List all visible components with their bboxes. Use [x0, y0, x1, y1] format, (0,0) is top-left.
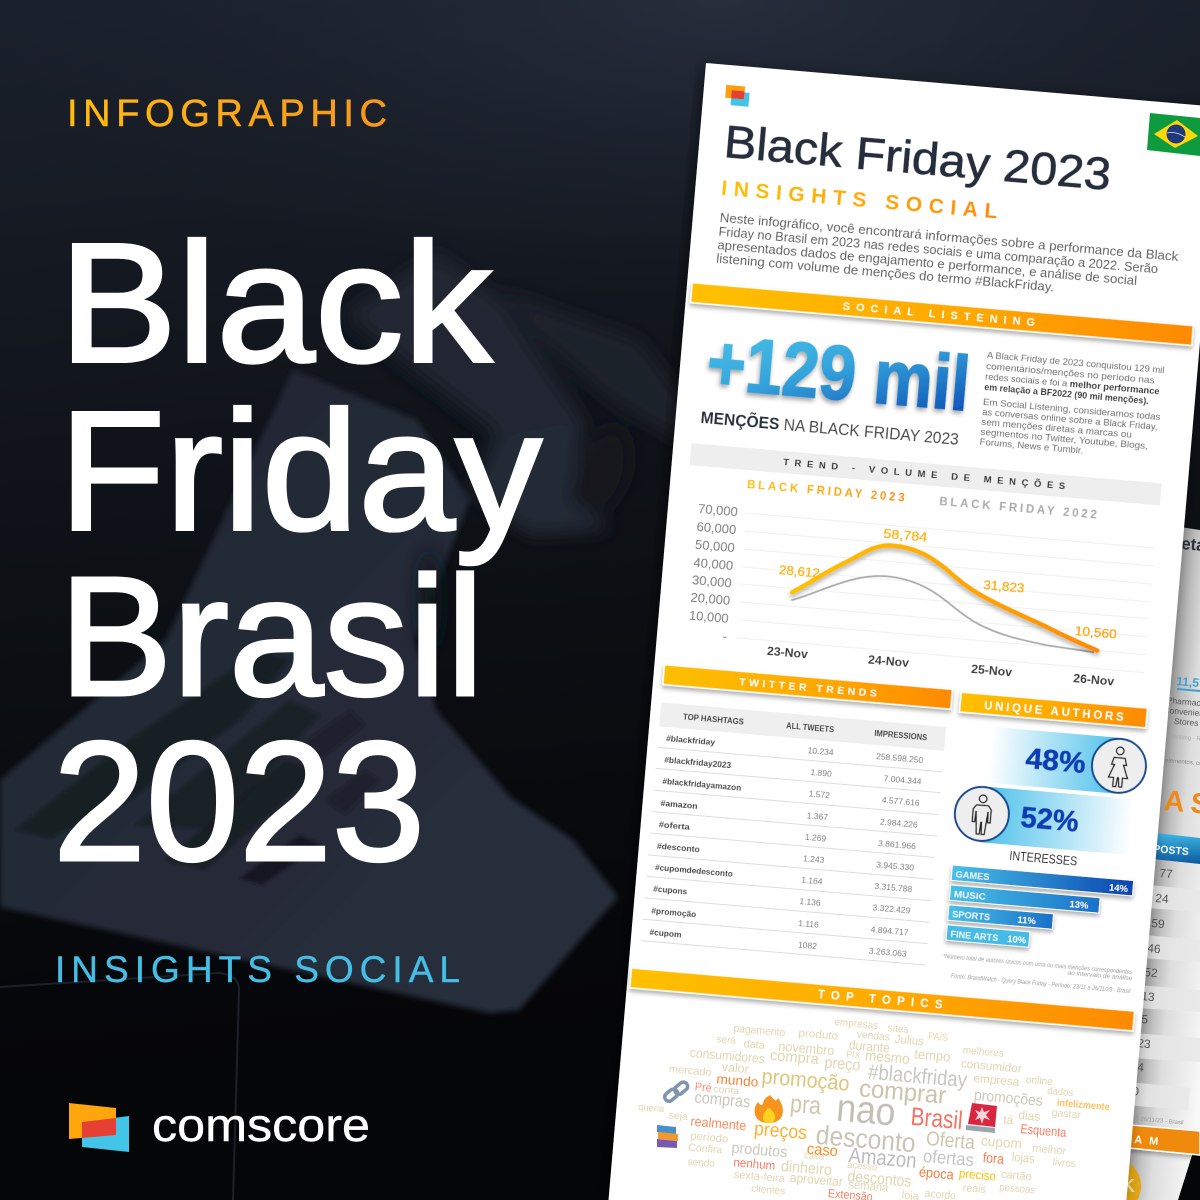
table: top hashtags: ALL TWEETS [786, 721, 835, 734]
table: top hashtags: #amazon [660, 798, 698, 811]
section band: twitter trends [663, 665, 952, 709]
word cloud: top topics: fora [982, 1149, 1005, 1167]
explanatory text: em relação a BF2022 (90 mil menções). [984, 382, 1149, 407]
word cloud: top topics: melhores [962, 1044, 1004, 1060]
word cloud: top topics: nenhum [733, 1155, 776, 1173]
word cloud: top topics: período [690, 1130, 729, 1146]
line chart: 50,000 [694, 537, 735, 555]
table: top hashtags: 1.136 [799, 896, 821, 908]
word cloud: top topics: casa [804, 1150, 825, 1163]
line chart: 20,000 [690, 590, 731, 608]
word cloud: top topics: reais [962, 1182, 987, 1196]
big number +129 mil: +129 mil [704, 319, 973, 428]
table: top hashtags: #blackfriday2023 [664, 755, 732, 770]
bar chart: interests: 14% [1109, 882, 1129, 895]
section band: twitter trends: TWITTER TRENDS [739, 676, 877, 700]
word cloud: top topics: online [1025, 1074, 1053, 1088]
table: top hashtags: 3.322.429 [872, 903, 911, 916]
legend: Black Friday 2022: BLACK FRIDAY 2022 [939, 496, 1097, 522]
word cloud: top topics: vendas [856, 1029, 890, 1043]
chart heading: trend [690, 443, 1162, 505]
second infographic page behind: 52 [1144, 965, 1159, 980]
line chart: 26-Nov [1073, 671, 1115, 689]
second infographic page behind: 24 [1155, 891, 1170, 906]
table: top hashtags: #promoção [651, 905, 697, 919]
line chart: 70,000 [698, 501, 738, 519]
second infographic page behind: POSTS [1153, 843, 1189, 858]
line chart: 23-Nov [766, 644, 809, 661]
bar chart: interests: 13% [1069, 899, 1089, 912]
main title: Friday [59, 376, 542, 566]
word cloud: top topics: consumidor [960, 1056, 1022, 1076]
word cloud: top topics: Brasil [910, 1103, 964, 1135]
section band: social listening [690, 283, 1193, 346]
word cloud: top topics: tempo [914, 1047, 951, 1065]
line chart [686, 501, 1156, 691]
section band: unique authors [959, 692, 1148, 728]
table: top hashtags: 1.890 [810, 767, 832, 779]
second infographic page behind: 5 [1141, 1012, 1149, 1027]
title: Black Friday 2023 [722, 116, 1113, 200]
word cloud: top topics: comprar [858, 1075, 947, 1110]
chart heading: trend: TREND - VOLUME DE MENÇÕES [783, 457, 1066, 492]
table: top hashtags: #desconto [657, 841, 700, 854]
table: top hashtags: #blackfridayamazon [662, 776, 742, 793]
second infographic page behind: 4 [1137, 1060, 1145, 1075]
word cloud: top topics: mesmo [864, 1048, 910, 1068]
second infographic page behind: Stores [1174, 716, 1199, 728]
word cloud: top topics: queria [638, 1102, 665, 1115]
word cloud: top topics: Esquenta [1020, 1121, 1068, 1140]
table: top hashtags: IMPRESSIONS [874, 729, 928, 742]
icon: siren [966, 1103, 997, 1133]
word cloud: top topics: tá [1003, 1113, 1014, 1127]
intro paragraph: Neste infográfico, você encontrará informações sobre a performance da Black [719, 211, 1180, 264]
heading: interesses: INTERESSES [1009, 849, 1078, 869]
table: top hashtags [641, 703, 946, 965]
word cloud: top topics: durante [848, 1037, 890, 1056]
line chart: - [722, 629, 728, 644]
word cloud: top topics: gastar [1051, 1107, 1082, 1121]
word cloud: top topics: mundo [716, 1071, 759, 1090]
second infographic page behind: 23 [1137, 1036, 1152, 1051]
subtitle: INSIGHTS SOCIAL: INSIGHTS SOCIAL [55, 949, 460, 990]
word cloud: top topics: sites [887, 1022, 909, 1036]
main title: Black [59, 208, 493, 398]
subtitle: INSIGHTS SOCIAL [720, 177, 998, 223]
word cloud: top topics: ofertas [922, 1146, 975, 1170]
sheet background [608, 63, 1200, 1200]
table: top hashtags: 1.243 [803, 853, 825, 865]
intro paragraph: apresentados dados de engajamento e performance, e análise de social [717, 238, 1138, 288]
word cloud: top topics: PIX [846, 1049, 861, 1062]
word cloud: top topics: cartão [1000, 1169, 1032, 1183]
word cloud: top topics: preço [824, 1055, 861, 1075]
explanatory text: redes sociais e foi a melhor performance [985, 372, 1160, 397]
intro paragraph [716, 212, 1178, 294]
word cloud: top topics: caso [806, 1141, 839, 1160]
bar chart: interests: FINE ARTS [950, 929, 999, 944]
main title: Brasil [59, 542, 484, 732]
comscore logo: comscore [152, 1099, 370, 1151]
word cloud: top topics: produto [798, 1027, 839, 1043]
section band: social listening: SOCIAL LISTENING [842, 301, 1036, 329]
bar chart: interests: GAMES [955, 869, 990, 883]
explanatory text: Forums, News e Tumblr. [979, 437, 1084, 457]
icon: chain link [663, 1080, 689, 1103]
table: top hashtags: 4.894.717 [870, 924, 909, 937]
bar chart: interests [946, 865, 1134, 956]
second infographic page behind: 46 [1147, 941, 1162, 956]
word cloud: top topics: #blackfriday [867, 1060, 968, 1092]
word cloud: top topics: promoções [973, 1087, 1044, 1110]
table: top hashtags: 1082 [798, 940, 818, 951]
main infographic page, rotated sheet [608, 63, 1200, 1200]
footnote and source: *Número total de autores únicos com uma ou mais menções correspondentes [943, 953, 1133, 976]
word cloud: top topics: época [918, 1164, 955, 1182]
line chart: 28,612 [778, 562, 820, 581]
second infographic page behind: AM [1134, 1134, 1166, 1149]
table: top hashtags: 3.315.788 [874, 881, 913, 894]
table: top hashtags: 1.164 [801, 875, 823, 887]
word cloud: top topics: clientes [751, 1184, 786, 1197]
second infographic page behind [1126, 528, 1200, 1200]
explanatory text [980, 352, 1164, 454]
word cloud: top topics: realmente [690, 1114, 747, 1133]
line chart: 25-Nov [971, 662, 1013, 679]
table: top hashtags: #cupomdedesconto [655, 862, 733, 879]
word cloud: top topics: empresas [834, 1016, 879, 1032]
intro paragraph: Friday no Brasil em 2023 nas redes sociais e uma comparação a 2022. Serão [718, 225, 1159, 276]
table: top hashtags: 3.861.966 [878, 838, 917, 851]
table: top hashtags: 3.263.063 [869, 946, 907, 959]
explanatory text: sem menções diretas a marcas ou [981, 417, 1132, 441]
table: top hashtags: 1.572 [808, 789, 831, 800]
table: top hashtags: 258.598.250 [876, 751, 924, 765]
line chart: 31,823 [983, 577, 1025, 595]
line chart: 40,000 [693, 555, 734, 573]
footnote and source [941, 953, 1134, 995]
table: top hashtags: 3.945.330 [876, 859, 915, 873]
word cloud: top topics: desconto [815, 1120, 917, 1158]
word cloud: top topics: descontos [847, 1168, 912, 1191]
word cloud: top topics: PAÍS [928, 1029, 949, 1044]
word cloud: top topics: aproveitar [789, 1170, 844, 1189]
word cloud: top topics: pessoas [999, 1181, 1036, 1197]
explanatory text: A Black Friday de 2023 conquistou 129 mil [987, 350, 1165, 376]
table: top hashtags: #blackfriday [666, 733, 716, 747]
word cloud: top topics: livros [1052, 1157, 1076, 1170]
line chart: 10,560 [1074, 623, 1117, 642]
line chart: 58,784 [883, 526, 928, 545]
second infographic page behind: K [1122, 1176, 1135, 1196]
word cloud: top topics: consumidores [689, 1045, 766, 1066]
footnote and source: ao intervalo de análise [1067, 970, 1133, 982]
table: top hashtags: 1.116 [798, 918, 820, 930]
word cloud: top topics: data [743, 1038, 766, 1052]
word cloud: top topics: Confira [688, 1142, 723, 1156]
bar chart: interests: SPORTS [952, 909, 990, 923]
table: top hashtags: 1.367 [806, 810, 829, 822]
bar chart: interests: MUSIC [953, 889, 986, 903]
second infographic page behind: 0 [1132, 1084, 1140, 1099]
section band: top topics [630, 968, 1135, 1031]
table: top hashtags: 7.004.344 [883, 773, 922, 787]
word cloud: top topics: Amazon [848, 1143, 917, 1173]
line chart: 30,000 [691, 572, 732, 591]
word cloud: top topics: mercado [668, 1063, 712, 1079]
table: top hashtags: 2.984.226 [880, 816, 918, 830]
word cloud: top topics: compras [694, 1089, 751, 1111]
male share: 52% [953, 784, 1135, 855]
word cloud: top topics: conta [713, 1084, 740, 1097]
word cloud: top topics: Julius [894, 1032, 924, 1048]
section band: unique authors: UNIQUE AUTHORS [984, 700, 1124, 724]
female share: 48%: 48% [1024, 743, 1087, 780]
word cloud: top topics: melhor [1032, 1143, 1067, 1157]
second infographic page behind: 23 26/11/23 - Brasil [1132, 1116, 1184, 1126]
line chart: 60,000 [696, 519, 737, 537]
word cloud: top topics: dinheiro [780, 1158, 833, 1179]
word cloud: top topics: pagamento [733, 1023, 786, 1039]
word cloud: top topics: promoção [761, 1064, 850, 1096]
table: top hashtags: TOP HASHTAGS [683, 712, 745, 727]
explanatory text: as conversas online sobre a Black Friday, [982, 407, 1158, 433]
male share: 52%: 52% [1019, 802, 1080, 839]
word cloud: top topics: semana [848, 1177, 889, 1195]
female share: 48% [988, 727, 1148, 796]
explanatory text: comentários/menções no período nas [986, 361, 1155, 386]
word cloud: top topics: Oferta [925, 1128, 977, 1154]
table: top hashtags: #cupom [649, 927, 682, 940]
word cloud: top topics: pra [789, 1090, 822, 1120]
word cloud: top topics: lojas [1011, 1150, 1035, 1166]
legend: Black Friday 2023: BLACK FRIDAY 2023 [747, 479, 905, 505]
icon: brazil flag [1147, 113, 1200, 156]
word cloud: top topics: nao [835, 1087, 897, 1134]
table: top hashtags: 1.269 [805, 832, 827, 844]
footnote and source: Fonte: BrandWatch - Query Black Friday - Período: 23/11 a 26/11/23 - Brasil [951, 973, 1131, 995]
comscore logo [69, 1099, 370, 1152]
word cloud: top topics: Pré [694, 1081, 712, 1095]
word cloud: top topics: será [716, 1034, 737, 1047]
word cloud: top topics: cupom [980, 1132, 1023, 1152]
word cloud: top topics: valor [721, 1060, 749, 1076]
explanatory text: segmentos no Twitter, Youtube, Blogs, [980, 427, 1148, 452]
caption: menções: MENÇÕES NA BLACK FRIDAY 2023 [700, 407, 960, 449]
word cloud: top topics: produtos [731, 1140, 788, 1161]
bar chart: interests: 11% [1017, 915, 1037, 927]
section band: top topics: TOP TOPICS [817, 989, 943, 1012]
word cloud: top topics: compra [769, 1047, 820, 1068]
icon: fire [755, 1095, 783, 1123]
word cloud: top topics: sendo [687, 1156, 715, 1170]
explanatory text: Em Social Listening, consideramos todas [983, 397, 1161, 423]
second infographic page behind: 13 [1141, 989, 1156, 1004]
word cloud: top topics: acesso [847, 1160, 878, 1173]
line chart: 10,000 [688, 608, 729, 626]
word cloud: top topics: preços [753, 1118, 808, 1144]
table: top hashtags: #cupons [653, 884, 688, 897]
icon: small comscore logo [725, 85, 750, 107]
second infographic page behind: 59 [1151, 916, 1166, 931]
table: top hashtags: 10.234 [807, 745, 834, 757]
word cloud: top topics: infelizmente [1056, 1098, 1110, 1113]
small heading: INFOGRAPHIC: INFOGRAPHIC [67, 93, 387, 135]
intro paragraph: listening com volume de menções do termo #BlackFriday. [716, 252, 1055, 295]
bar chart: interests: 10% [1007, 934, 1027, 947]
second infographic page behind: 77 [1159, 866, 1174, 881]
main title: 2023 [53, 707, 425, 897]
main title [53, 208, 542, 897]
line chart: 24-Nov [868, 653, 910, 670]
word cloud: top topics [638, 1016, 1110, 1200]
table: top hashtags: #oferta [658, 819, 690, 832]
word cloud: top topics: novembro [778, 1039, 835, 1058]
table: top hashtags: 4.577.616 [881, 795, 920, 808]
icon: books [657, 1125, 678, 1148]
word cloud: top topics: preciso [958, 1166, 996, 1184]
word cloud: top topics: seja [668, 1110, 689, 1123]
word cloud: top topics: dados [1047, 1086, 1074, 1099]
word cloud: top topics: empresa [973, 1071, 1020, 1089]
word cloud: top topics: sexta-feira [733, 1169, 786, 1185]
word cloud: top topics: dias [1018, 1108, 1041, 1124]
